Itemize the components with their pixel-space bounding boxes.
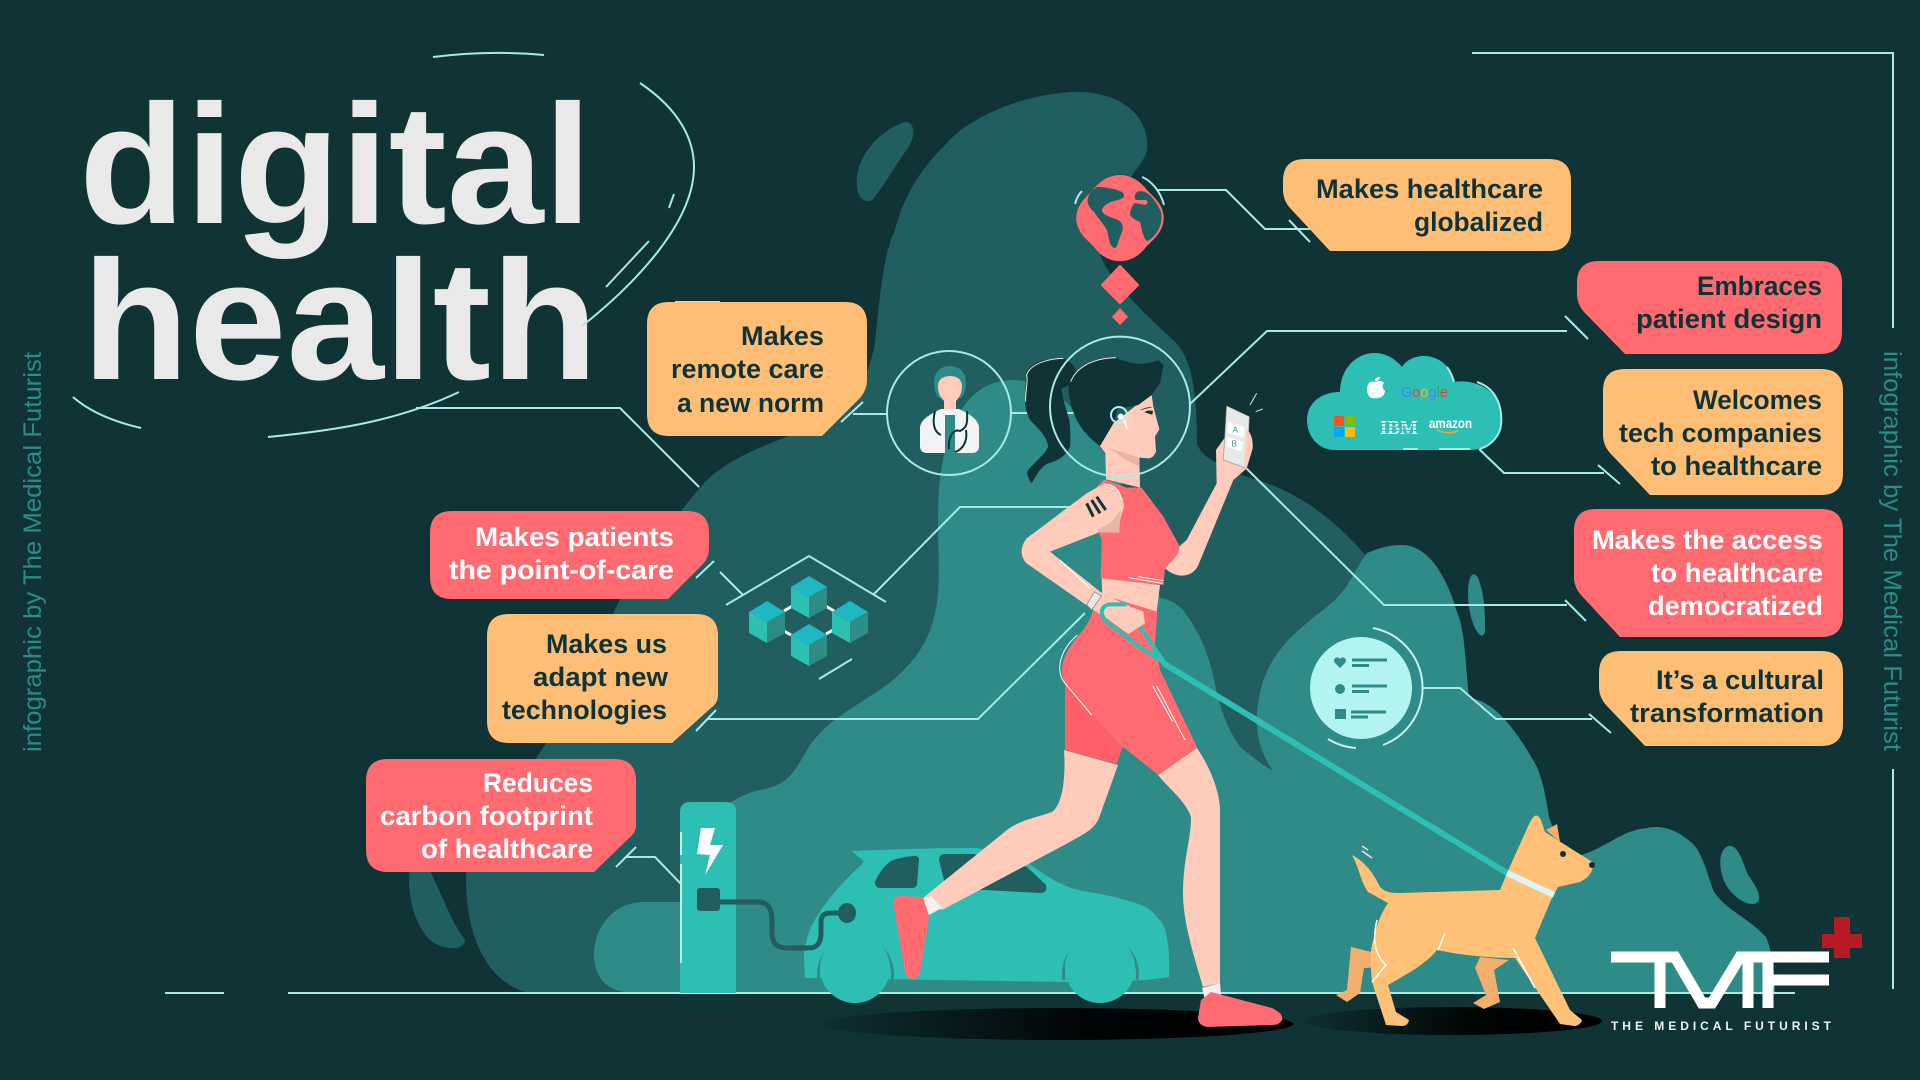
amazon logo: amazon xyxy=(1429,415,1472,431)
small diamond xyxy=(1112,308,1128,325)
window rear xyxy=(939,854,1046,893)
tail motion lines xyxy=(1362,846,1372,858)
cube right xyxy=(832,601,868,643)
doctor coat xyxy=(920,409,979,453)
shadow: dog xyxy=(1304,1007,1602,1035)
icon: blockchain cubes xyxy=(726,556,886,679)
title xyxy=(79,70,598,416)
cable socket xyxy=(838,903,856,923)
links xyxy=(777,601,840,635)
shorts highlights xyxy=(1060,635,1185,740)
callout: access democratized xyxy=(1574,509,1843,637)
side label: right: infographic by The Medical Futurist xyxy=(1878,351,1906,751)
callout: carbon footprint: Reduces xyxy=(483,768,593,798)
front shoe xyxy=(1198,992,1282,1027)
midriff xyxy=(1102,578,1160,612)
wheel arches xyxy=(818,937,1137,980)
phone: A xyxy=(1233,426,1239,435)
callout: welcomes tech companies xyxy=(1603,369,1843,495)
callout: point-of-care: Makes patients xyxy=(475,522,674,552)
callout: remote care xyxy=(647,302,867,436)
fur highlights xyxy=(1372,920,1535,988)
callout: carbon footprint: of healthcare xyxy=(421,834,593,864)
left arm xyxy=(1022,484,1145,634)
square xyxy=(1335,709,1346,719)
heart xyxy=(1334,657,1346,668)
callout: welcomes tech companies: to healthcare xyxy=(1651,451,1822,481)
rear sock xyxy=(923,896,942,915)
google logo: Google xyxy=(1401,385,1448,401)
large diamond xyxy=(1102,266,1138,303)
collar xyxy=(1507,873,1554,895)
callout: embraces patient design xyxy=(1577,261,1842,354)
woman running xyxy=(893,337,1507,1027)
fingers over phone xyxy=(1244,430,1253,468)
callout: access democratized: to healthcare xyxy=(1651,558,1823,588)
phone spark lines xyxy=(1250,393,1263,412)
callout: adapt new technologies: adapt new xyxy=(533,662,668,692)
callout: adapt new technologies: Makes us xyxy=(546,629,667,659)
circle xyxy=(887,351,1011,475)
icon: cloud with tech logos xyxy=(1307,353,1502,450)
callout: point-of-care: the point-of-care xyxy=(449,555,674,585)
cable xyxy=(720,902,840,948)
callout: remote care: a new norm xyxy=(677,388,824,418)
chevron lines xyxy=(726,556,886,679)
phone: B xyxy=(1232,440,1237,449)
callout: carbon footprint: carbon footprint xyxy=(380,801,593,831)
callout: cultural transformation xyxy=(1599,651,1843,746)
car xyxy=(804,848,1169,1003)
wheel front xyxy=(820,933,890,1003)
callout: makes healthcare globalized: Makes healthcare xyxy=(1316,174,1543,204)
red plus xyxy=(1822,917,1862,958)
stethoscope xyxy=(934,411,967,452)
callout: point-of-care xyxy=(430,511,709,599)
shadow: woman xyxy=(823,1008,1293,1040)
wristband xyxy=(1087,592,1102,610)
doctor hair xyxy=(934,366,966,398)
callout: access democratized: democratized xyxy=(1648,591,1823,621)
doctor face xyxy=(938,376,962,403)
car body xyxy=(804,848,1169,982)
doctor scrubs xyxy=(945,415,955,453)
connector lines xyxy=(416,190,1620,884)
far ear xyxy=(1546,824,1560,842)
front leg xyxy=(1158,748,1220,987)
icon: globe with diamonds xyxy=(1075,175,1164,325)
shorts xyxy=(1062,595,1197,775)
earbud xyxy=(1111,407,1127,429)
cloud highlight xyxy=(1403,367,1501,449)
far front leg xyxy=(1473,957,1509,1009)
doctor neck xyxy=(944,396,956,414)
callout: adapt new technologies: technologies xyxy=(502,695,667,725)
callout: welcomes tech companies: Welcomes xyxy=(1693,385,1822,415)
leash xyxy=(1163,663,1507,873)
disc xyxy=(1310,637,1412,739)
callout: embraces patient design: patient design xyxy=(1636,304,1822,334)
callout: makes healthcare globalized: globalized xyxy=(1414,207,1543,237)
side label: left: infographic by The Medical Futurist xyxy=(19,352,47,752)
callout: carbon footprint xyxy=(366,759,636,872)
front sock xyxy=(1202,983,1221,1000)
phone xyxy=(1223,406,1249,468)
callout: remote care: Makes xyxy=(741,321,824,351)
cube top xyxy=(791,576,827,618)
plug xyxy=(697,888,720,911)
body xyxy=(1352,815,1594,1026)
arm highlight xyxy=(1060,484,1122,588)
eye xyxy=(1560,851,1566,857)
background leaf: far right xyxy=(1720,846,1759,904)
callout: cultural transformation: transformation xyxy=(1630,698,1824,728)
background leaf: top xyxy=(857,122,913,201)
arm tattoo xyxy=(1087,497,1106,517)
continents xyxy=(1088,187,1124,248)
ponytail xyxy=(1025,358,1077,483)
list lines xyxy=(1351,660,1387,717)
bolt xyxy=(697,828,723,875)
globe arcs xyxy=(1075,177,1164,205)
cube left xyxy=(749,601,785,643)
leash loop xyxy=(1102,604,1165,663)
neck shadow xyxy=(1110,448,1139,467)
underarm shadow xyxy=(1097,510,1121,533)
nose xyxy=(1589,862,1595,868)
rear shoe xyxy=(893,896,929,979)
icon: EV charger xyxy=(680,802,856,993)
callout: embraces patient design: Embraces xyxy=(1697,271,1822,301)
top stripes xyxy=(1128,577,1163,583)
upper body xyxy=(1022,337,1263,775)
globe xyxy=(1076,175,1164,261)
microsoft logo xyxy=(1334,416,1355,437)
right arm xyxy=(1165,433,1247,576)
callout: makes healthcare globalized xyxy=(1283,159,1571,251)
background leaf: bottom left xyxy=(409,854,465,948)
callout: welcomes tech companies: tech companies xyxy=(1619,418,1822,448)
logo: The Medical Futurist xyxy=(1611,917,1862,1033)
charger body xyxy=(680,802,736,993)
callout: cultural transformation: It’s a cultural xyxy=(1656,665,1824,695)
shorts rear shade xyxy=(1065,683,1123,764)
icon: checklist circle xyxy=(1310,628,1423,748)
wordmark: THE MEDICAL FUTURIST xyxy=(1611,1019,1832,1033)
far back leg xyxy=(1336,947,1386,1002)
apple logo xyxy=(1367,377,1385,398)
crop top xyxy=(1097,479,1179,585)
icon: doctor in circle xyxy=(887,351,1011,475)
charger line xyxy=(680,832,682,963)
dog xyxy=(1336,815,1595,1026)
eye xyxy=(1141,407,1153,414)
callout: remote care: remote care xyxy=(671,354,824,384)
dot xyxy=(1335,684,1345,694)
decorative swooshes around title xyxy=(73,53,694,437)
cloud xyxy=(1307,353,1502,450)
callout: adapt new technologies xyxy=(487,614,718,743)
title line 1: digital xyxy=(79,70,592,260)
hair highlights xyxy=(1026,358,1116,402)
ibm logo: IBM xyxy=(1380,417,1418,439)
callout: access democratized: Makes the access xyxy=(1592,525,1823,555)
wheel rear xyxy=(1065,933,1135,1003)
title line 2: health xyxy=(82,226,598,416)
background leaf: right xyxy=(1468,574,1485,636)
TMF mark xyxy=(1611,957,1829,1008)
background blob: dark teal xyxy=(466,92,1400,993)
head circle xyxy=(1050,337,1190,477)
cube bottom xyxy=(791,624,827,666)
frame lines xyxy=(165,53,1893,993)
window front xyxy=(875,856,919,888)
rear leg xyxy=(923,750,1118,910)
background blob: mid teal xyxy=(594,380,1775,993)
hair xyxy=(1068,358,1163,446)
outer arcs xyxy=(1328,628,1423,748)
neck and face xyxy=(1100,395,1159,488)
